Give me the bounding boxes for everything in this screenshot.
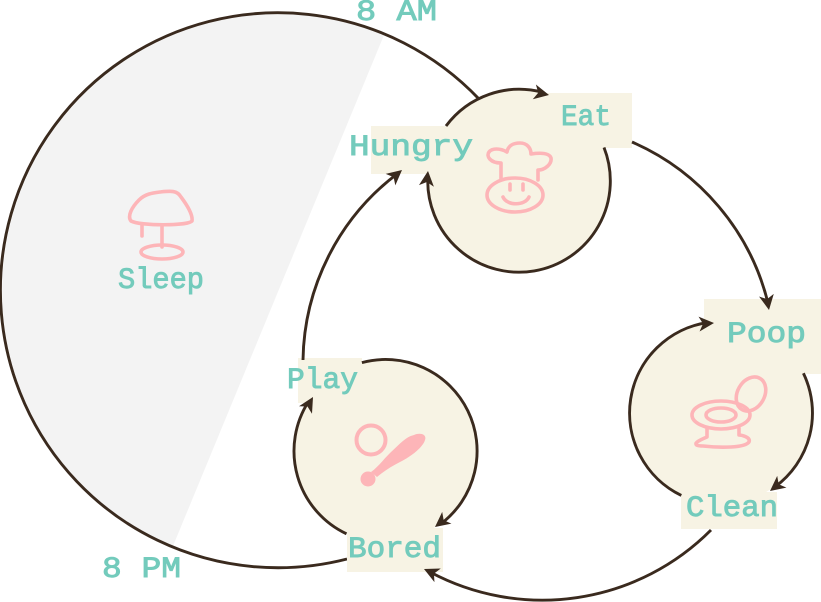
label: eat [547,93,632,148]
arrow: eat to poop [632,142,776,311]
panel: sleep half circle [2,14,384,546]
icon: toilet [692,372,772,447]
panel: eat circle [428,90,610,272]
label: clean: Clean [686,492,778,526]
icon: lamp [130,191,192,259]
label: sleep: Sleep [118,264,204,298]
label: poop: Poop [727,318,806,352]
arrow: play to bored [362,359,477,533]
arrow: bored to play [294,393,346,534]
label: play: Play [287,364,358,398]
icon: chef face [487,143,551,212]
label: hungry: Hungry [349,131,473,165]
icon: ball and bat [356,426,425,486]
arrow: hungry to eat [446,85,551,126]
label: eat: Eat [561,101,611,135]
label: bored: Bored [348,533,441,567]
arrow: eat to hungry [419,148,610,272]
panel: bored circle [294,360,476,542]
label: hungry [349,126,473,174]
arrow: play to hungry [303,164,407,360]
arrow: poop to clean [765,373,812,497]
arrow: clean to poop [630,316,715,495]
label: 8 PM: 8 PM [102,553,181,587]
label: poop [704,299,821,374]
day circle outline [0,13,479,568]
arrow: clean to bored [421,530,711,600]
panel: poop circle [630,322,812,504]
